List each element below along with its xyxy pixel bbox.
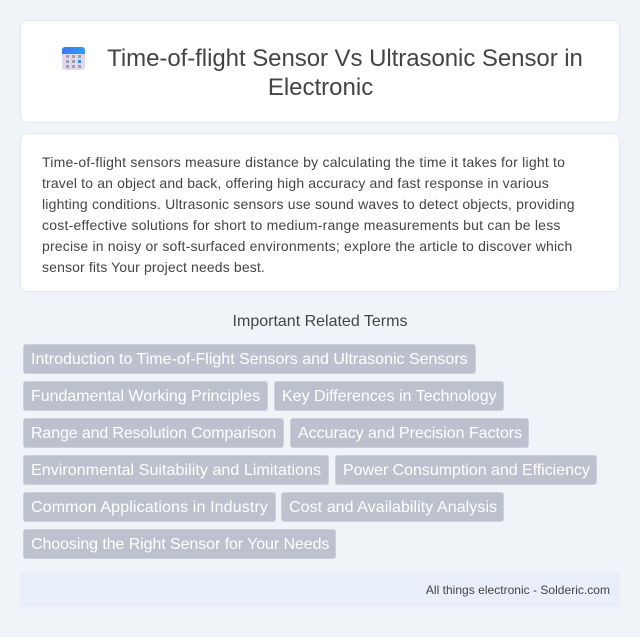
intro paragraph: lighting conditions. Ultrasonic sensors use sound waves to detect objects, providing: [42, 196, 575, 212]
related terms chips: [23, 344, 597, 559]
chip: Introduction to Time-of-Flight Sensors and Ultrasonic Sensors: [31, 351, 468, 368]
intro paragraph: travel to an object and back, offering high accuracy and fast response in various: [42, 175, 549, 191]
related terms heading: Important Related Terms: [233, 313, 407, 330]
icon: calendar: [62, 47, 85, 70]
chip: [23, 344, 476, 374]
chip: [274, 381, 504, 411]
intro paragraph: Time-of-flight sensors measure distance by calculating the time it takes for light to: [42, 154, 565, 170]
chip: [23, 455, 329, 485]
chip: Environmental Suitability and Limitations: [31, 462, 321, 479]
chip: Range and Resolution Comparison: [31, 425, 276, 442]
title: [107, 45, 583, 101]
chip: Fundamental Working Principles: [31, 388, 260, 405]
chip: Cost and Availability Analysis: [289, 499, 497, 516]
chip: [335, 455, 597, 485]
intro paragraph: precise in noisy or soft-surfaced environments; explore the article to discover which: [42, 238, 572, 254]
chip: [23, 529, 336, 559]
chip: [290, 418, 529, 448]
chip: Choosing the Right Sensor for Your Needs: [31, 536, 329, 553]
chip: [281, 492, 504, 522]
footer bar: [20, 573, 620, 607]
intro paragraph: [42, 154, 575, 275]
title: Electronic: [268, 74, 373, 101]
chip: [23, 381, 268, 411]
intro paragraph: sensor fits Your project needs best.: [42, 259, 265, 275]
footer text: All things electronic - Solderic.com: [426, 583, 610, 597]
chip: Key Differences in Technology: [282, 388, 497, 405]
chip: Power Consumption and Efficiency: [343, 462, 590, 479]
header panel: [20, 20, 620, 123]
chip: Common Applications in Industry: [31, 499, 268, 516]
chip: [23, 418, 284, 448]
intro text panel: [20, 133, 620, 292]
chip: [23, 492, 276, 522]
title: Time-of-flight Sensor Vs Ultrasonic Sensor in: [107, 45, 583, 72]
intro paragraph: cost-effective solutions for short to medium-range measurements but can be less: [42, 217, 561, 233]
chip: Accuracy and Precision Factors: [298, 425, 522, 442]
